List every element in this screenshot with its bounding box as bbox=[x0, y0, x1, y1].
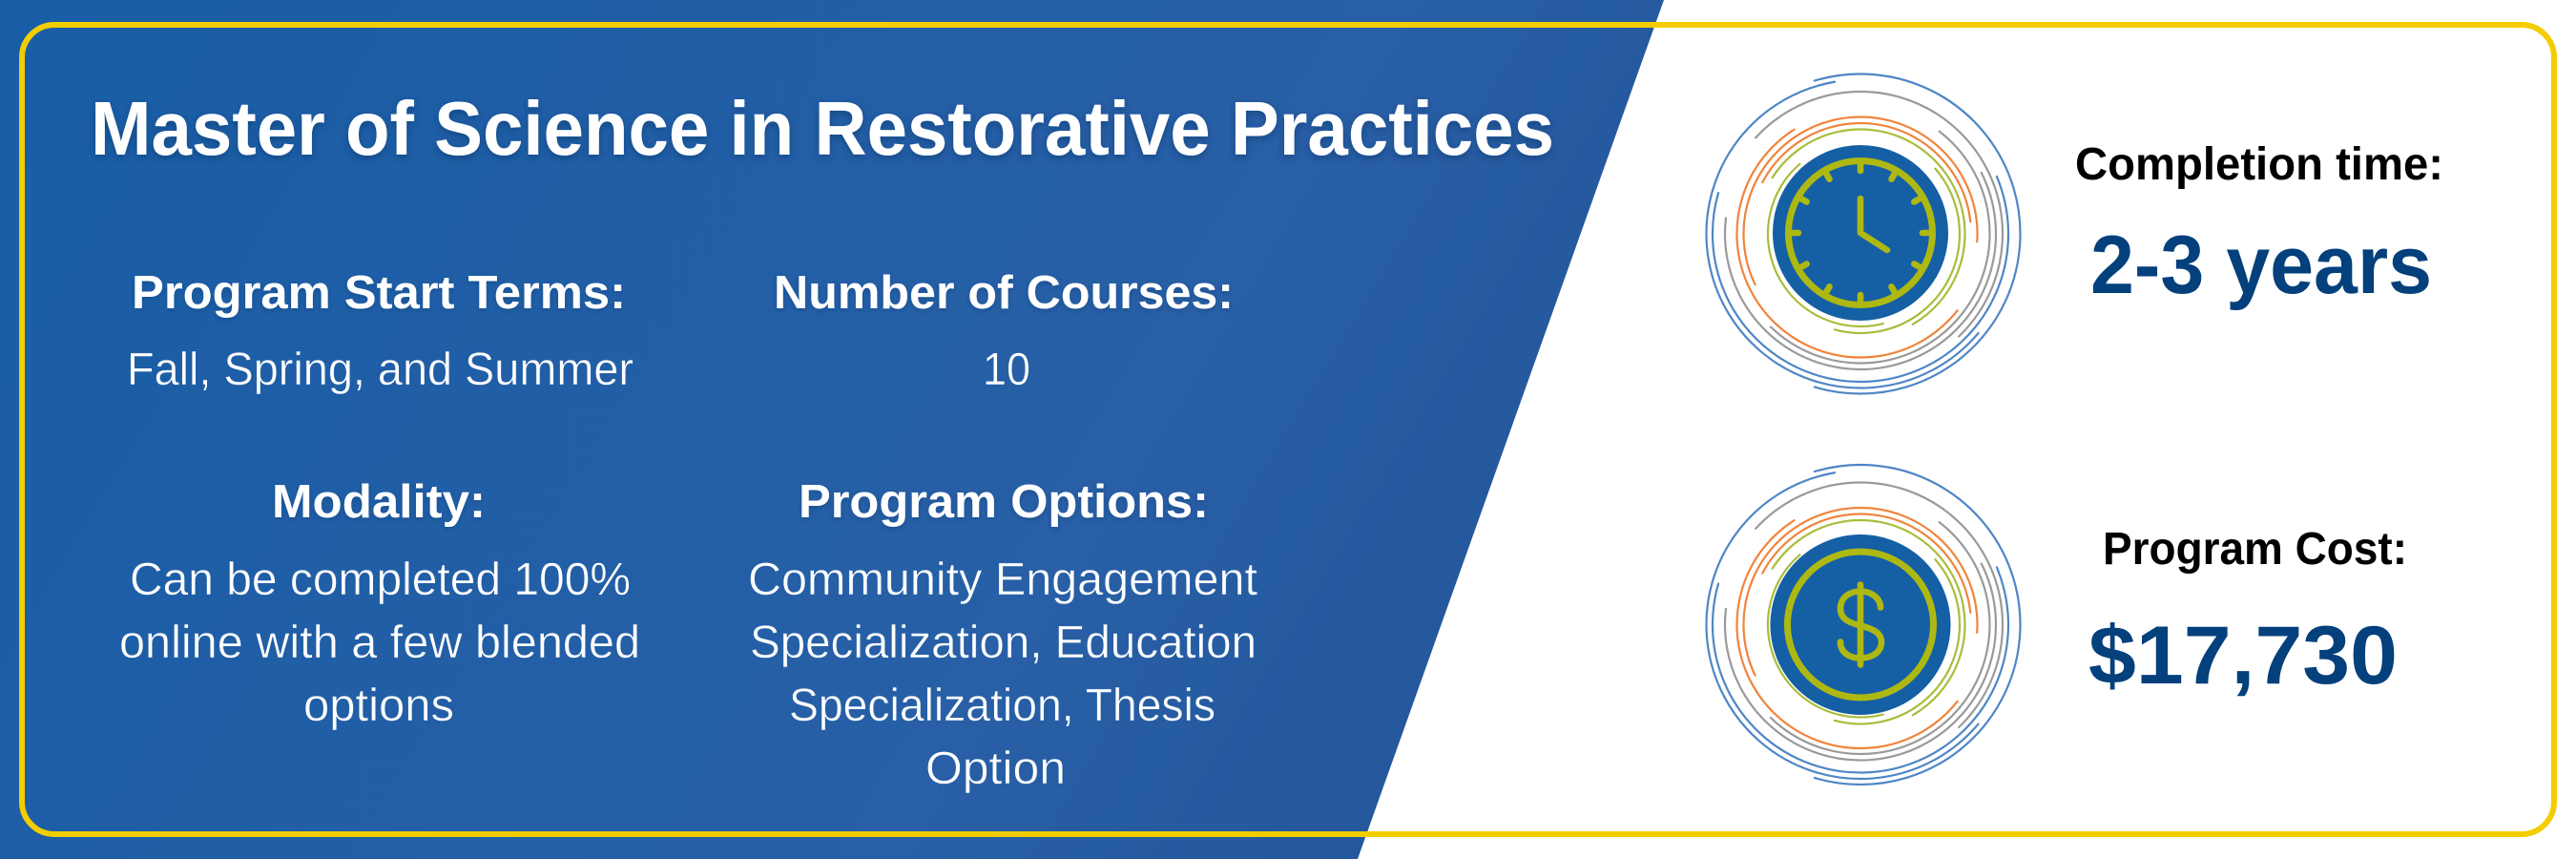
text block: program cost bbox=[2088, 524, 2407, 702]
text block: program options: Community Engagement bbox=[748, 555, 1257, 605]
text block: modality bbox=[119, 476, 640, 731]
text block: program start terms bbox=[127, 267, 634, 395]
text block: program options bbox=[748, 476, 1257, 794]
title: Master of Science in Restorative Practices bbox=[91, 86, 1554, 171]
icon: dollar coin with concentric rings bbox=[1643, 408, 2078, 842]
text block: completion time bbox=[2075, 139, 2443, 311]
text block: completion time: Completion time: bbox=[2075, 139, 2443, 190]
text block: number of courses: 10 bbox=[983, 345, 1030, 395]
text block: program options: Specialization, Education bbox=[750, 618, 1257, 668]
text block: program start terms: Program Start Terms: bbox=[132, 267, 626, 319]
text block: modality: online with a few blended bbox=[119, 618, 640, 668]
text block: modality: Modality: bbox=[272, 476, 486, 528]
text block: program cost: $17,730 bbox=[2088, 610, 2398, 702]
text block: program options: Program Options: bbox=[799, 476, 1209, 528]
text block: completion time: 2-3 years bbox=[2090, 220, 2432, 311]
text block: modality: options bbox=[303, 681, 454, 731]
text block: number of courses: Number of Courses: bbox=[774, 267, 1234, 319]
text block: program cost: Program Cost: bbox=[2103, 524, 2407, 575]
text block: number of courses bbox=[774, 267, 1234, 395]
text block: modality: Can be completed 100% bbox=[130, 555, 631, 605]
panel: blue slanted background bbox=[0, 0, 1664, 859]
text block: program start terms: Fall, Spring, and Summer bbox=[127, 345, 634, 395]
text block: program options: Specialization, Thesis bbox=[789, 681, 1215, 731]
icon: clock with concentric rings bbox=[1643, 16, 2078, 451]
text block: program options: Option bbox=[925, 744, 1066, 794]
